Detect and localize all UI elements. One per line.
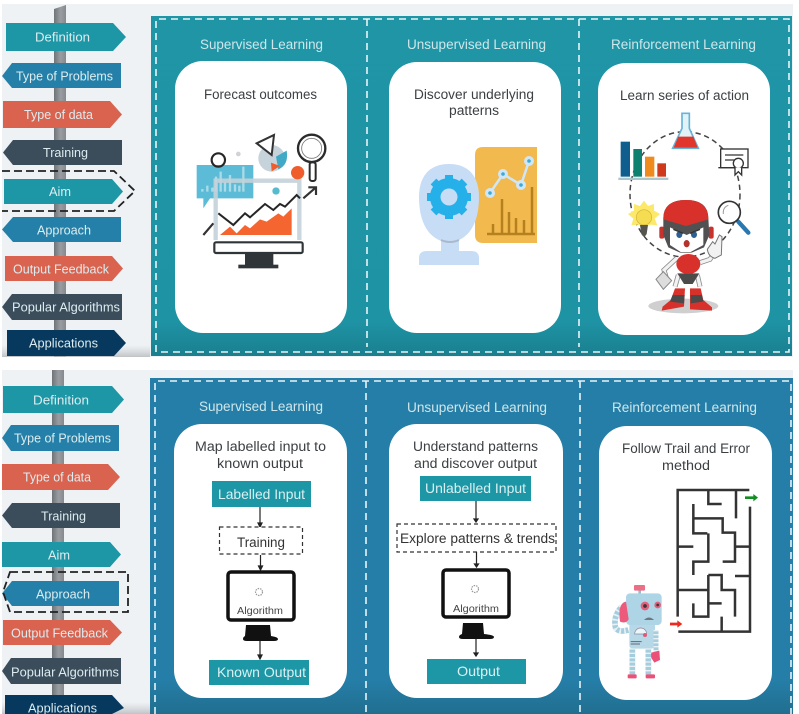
sign: Definition: Definition (33, 394, 89, 408)
icon: algorithm monitor: Algorithm (237, 606, 283, 617)
sign: Definition (6, 23, 126, 51)
box: Output: Output (457, 663, 500, 679)
arrow (258, 555, 262, 570)
card text: and discover output (414, 456, 537, 471)
panel: top comparison (151, 16, 792, 356)
sign: Type of data: Type of data (24, 108, 93, 122)
signpost pole (54, 5, 66, 357)
sign: Popular Algorithms (2, 294, 122, 320)
illustration: head with gear and chart (419, 147, 537, 265)
card: supervised approach (174, 424, 347, 698)
box: Unlabelled Input: Unlabelled Input (425, 480, 526, 496)
sign: Type of data: Type of data (23, 470, 91, 484)
sign: Output Feedback (3, 620, 122, 645)
box: Training: Training (237, 535, 285, 550)
sign: Definition (3, 386, 124, 413)
card: learn series of action (598, 63, 770, 335)
card text: method (662, 458, 710, 473)
icon: algorithm monitor (228, 572, 294, 641)
sign: Approach (2, 217, 121, 242)
card text: Follow Trail and Error (622, 441, 750, 456)
sign: Applications (7, 330, 126, 356)
card text (413, 439, 538, 471)
illustration: robot with icons (618, 113, 748, 257)
top navigation signpost (2, 5, 150, 357)
sign: Output Feedback (5, 256, 123, 281)
sign: Output Feedback: Output Feedback (11, 626, 109, 640)
card: trial and error (599, 426, 772, 700)
top slide background (2, 4, 793, 357)
sign: Type of data (3, 101, 122, 128)
sign: Output Feedback: Output Feedback (13, 262, 110, 276)
light bulb icon (628, 201, 660, 236)
bottom navigation signpost (2, 370, 150, 714)
entry arrow (670, 620, 682, 628)
robot (648, 200, 722, 313)
box: Labelled Input: Labelled Input (218, 486, 305, 502)
card text: Discover underlying (414, 87, 534, 102)
heading: Supervised Learning: Supervised Learning (199, 399, 323, 414)
box: Training (220, 527, 302, 554)
illustration: maze (670, 490, 758, 632)
robot and nearby icons (628, 200, 748, 313)
chart icon (618, 142, 668, 180)
card text: patterns (449, 103, 499, 118)
bottom slide background (2, 370, 793, 714)
magnifier icon (718, 201, 748, 233)
arrow (474, 501, 478, 522)
sign: Type of Problems: Type of Problems (14, 432, 111, 446)
icon: algorithm monitor (443, 570, 509, 639)
sign: Training (2, 503, 120, 528)
flask icon (673, 113, 698, 148)
sign: Aim: Aim (48, 548, 70, 562)
box: Known Output: Known Output (217, 664, 306, 680)
sign: Type of Problems: Type of Problems (16, 70, 113, 84)
card: discover underlying patterns (389, 62, 561, 333)
sign: Type of Problems (2, 425, 119, 451)
box: Output (427, 659, 526, 684)
sign: Training: Training (43, 146, 88, 160)
sign: Aim highlighted (2, 171, 135, 211)
card text (622, 441, 750, 473)
icon: algorithm monitor: Algorithm (453, 604, 499, 615)
sign: Type of Problems (2, 63, 121, 88)
sign: Approach highlighted (2, 572, 128, 612)
sign: Type of data (2, 464, 120, 490)
heading: Reinforcement Learning: Reinforcement Learning (611, 37, 756, 52)
heading: Unsupervised Learning: Unsupervised Learning (407, 400, 547, 415)
certificate icon (718, 149, 748, 175)
box: Labelled Input (212, 481, 311, 507)
sign: Training: Training (41, 510, 86, 524)
card text: Learn series of action (620, 88, 749, 103)
card text (414, 87, 534, 118)
card: forecast outcomes (175, 61, 347, 333)
arrow (258, 641, 262, 659)
box: Explore patterns and trends: Explore patterns & trends (400, 531, 555, 546)
arrow (474, 552, 478, 567)
sign: Popular Algorithms (2, 658, 121, 684)
sign: Popular Algorithms: Popular Algorithms (11, 666, 119, 680)
box: Known Output (209, 660, 309, 685)
signpost pole (52, 370, 64, 707)
sign: Aim highlighted: Aim (49, 185, 71, 199)
card text: Map labelled input to (195, 439, 326, 454)
heading: Unsupervised Learning: Unsupervised Learning (407, 37, 546, 52)
panel: bottom comparison (150, 378, 793, 714)
sign: Applications (5, 695, 124, 714)
card text: Forecast outcomes (204, 87, 317, 102)
sign: Applications: Applications (29, 336, 98, 350)
illustration: robot (615, 585, 662, 678)
card text: known output (217, 456, 303, 471)
illustration: forecast monitor (197, 135, 325, 268)
sign: Popular Algorithms: Popular Algorithms (12, 300, 120, 314)
box: Unlabelled Input (420, 476, 531, 501)
heading: Supervised Learning: Supervised Learning (200, 37, 323, 52)
heading: Reinforcement Learning: Reinforcement Learning (612, 400, 757, 415)
sign: Training (3, 140, 122, 165)
box: Explore patterns and trends (397, 524, 556, 552)
card: unsupervised approach (389, 424, 563, 698)
card text: Understand patterns (413, 439, 538, 454)
sign: Definition: Definition (35, 30, 90, 44)
sign: Aim (2, 542, 121, 567)
card text (195, 439, 326, 471)
sign: Approach: Approach (37, 224, 91, 238)
exit arrow (745, 494, 758, 501)
sign: Approach highlighted: Approach (36, 588, 90, 602)
arrow (474, 639, 478, 656)
arrow (258, 507, 262, 527)
